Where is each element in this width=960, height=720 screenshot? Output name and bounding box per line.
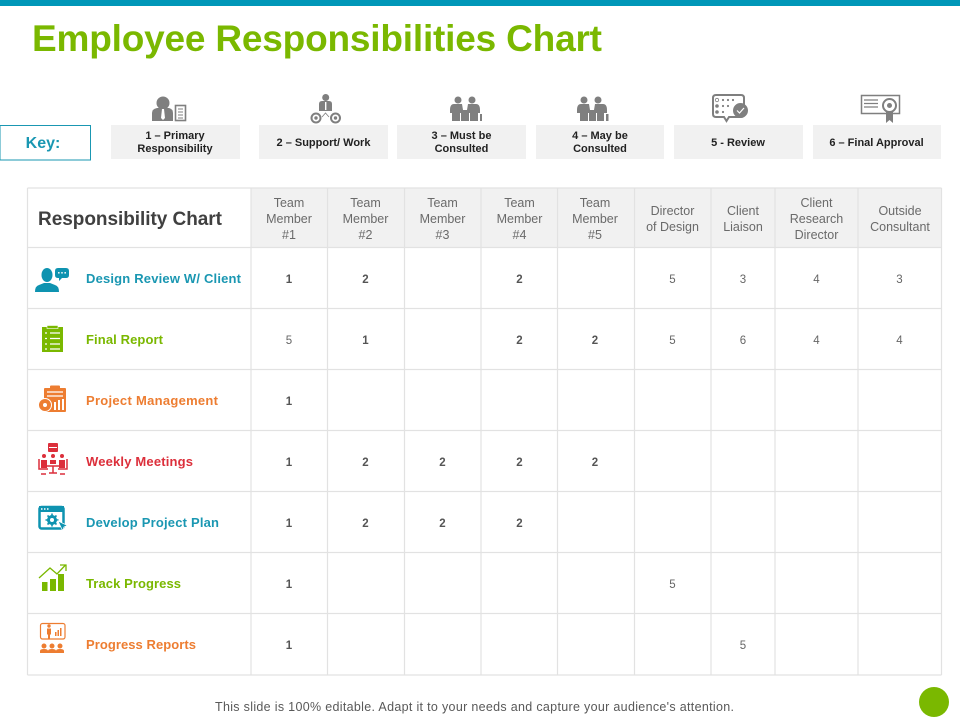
row: project management	[38, 386, 293, 412]
key label: Key:	[26, 135, 60, 152]
row: track progress: 1	[286, 579, 293, 591]
row: final report: 2	[592, 335, 598, 347]
row: progress reports	[40, 624, 746, 653]
key item 5: review	[674, 95, 803, 159]
row: design review: 2	[362, 274, 369, 286]
row: develop project plan	[39, 506, 523, 530]
row: track progress	[39, 565, 676, 591]
column headers: Director	[651, 204, 694, 218]
row: track progress: Track Progress	[86, 576, 181, 591]
row: track progress: 5	[669, 579, 676, 591]
row: develop project plan: 1	[286, 518, 293, 530]
key item 4: may be consulted	[536, 96, 664, 159]
top accent bar	[0, 0, 960, 6]
column headers: #5	[588, 228, 602, 242]
row: weekly meetings: 1	[286, 457, 293, 469]
key item 4: may be consulted: Consulted	[573, 143, 627, 155]
key item 6: final approval: 6 – Final Approval	[829, 137, 924, 149]
key label	[0, 126, 90, 160]
row: design review	[35, 268, 903, 292]
row: final report: 5	[286, 335, 292, 347]
key item 3: must be consulted: 3 – Must be	[432, 130, 491, 142]
chart heading: Responsibility Chart	[38, 209, 223, 230]
key item 1: primary responsibility	[111, 96, 240, 159]
column headers: Consultant	[870, 220, 930, 234]
column headers: Member	[497, 212, 542, 226]
column headers: Team	[274, 196, 304, 210]
column headers: #1	[282, 228, 296, 242]
key item 3: must be consulted	[397, 96, 526, 159]
row: weekly meetings	[39, 443, 598, 474]
row: final report: 6	[740, 335, 746, 347]
row: final report: 5	[669, 335, 676, 347]
row: weekly meetings: 2	[439, 457, 446, 469]
row: weekly meetings: Weekly Meetings	[86, 454, 193, 469]
row: weekly meetings: 2	[516, 457, 523, 469]
column headers: Team	[504, 196, 535, 210]
footer note: This slide is 100% editable. Adapt it to your needs and capture your audience's attention.	[215, 700, 734, 714]
key item 1: primary responsibility: 1 – Primary	[145, 130, 206, 142]
column headers: Member	[572, 212, 618, 226]
row: final report	[42, 326, 903, 352]
row: progress reports: Progress Reports	[86, 637, 196, 652]
row: project management: Project Management	[86, 393, 219, 408]
column headers	[266, 196, 930, 242]
column headers: Member	[343, 212, 388, 226]
row: design review: 3	[740, 274, 746, 286]
row: design review: 5	[669, 274, 676, 286]
column headers: #3	[436, 228, 449, 242]
column headers: of Design	[646, 220, 699, 234]
row: develop project plan: 2	[362, 518, 369, 530]
column headers: Client	[801, 196, 833, 210]
key item 5: review: 5 - Review	[711, 137, 765, 149]
title: Employee Responsibilities Chart	[32, 18, 602, 59]
row: develop project plan: 2	[516, 518, 523, 530]
row: develop project plan: 2	[439, 518, 446, 530]
column headers: Team	[580, 196, 610, 210]
row: final report: 4	[896, 335, 903, 347]
key item 6: final approval	[813, 96, 941, 159]
page marker circle	[919, 687, 949, 717]
key item 2: support / work: 2 – Support/ Work	[277, 137, 371, 149]
row: final report: Final Report	[86, 332, 164, 347]
column headers: #4	[513, 228, 526, 242]
row: project management: 1	[286, 396, 293, 408]
column headers: Member	[266, 212, 312, 226]
key item 4: may be consulted: 4 – May be	[572, 130, 628, 142]
row: final report: 1	[362, 335, 369, 347]
row: design review: Design Review W/ Client	[86, 271, 242, 286]
key item 3: must be consulted: Consulted	[435, 143, 488, 155]
column headers: Director	[795, 228, 838, 242]
row: final report: 4	[813, 335, 820, 347]
column headers: Liaison	[723, 220, 763, 234]
row: weekly meetings: 2	[362, 457, 369, 469]
key item 1: primary responsibility: Responsibility	[137, 143, 213, 155]
row: final report: 2	[516, 335, 523, 347]
column headers: Team	[427, 196, 458, 210]
row: design review: 3	[896, 274, 903, 286]
responsibility table	[28, 188, 942, 675]
column headers: Team	[350, 196, 381, 210]
row: weekly meetings: 2	[592, 457, 598, 469]
key item 2: support / work	[259, 94, 388, 159]
column headers: #2	[359, 228, 372, 242]
row: design review: 2	[516, 274, 523, 286]
column headers: Client	[727, 204, 760, 218]
table header background	[251, 188, 941, 248]
column headers: Outside	[878, 204, 922, 218]
row: progress reports: 5	[740, 640, 746, 652]
row: develop project plan: Develop Project Plan	[86, 515, 219, 530]
column headers: Member	[420, 212, 465, 226]
row: progress reports: 1	[286, 640, 293, 652]
row: design review: 4	[813, 274, 820, 286]
column headers: Research	[790, 212, 843, 226]
row: design review: 1	[286, 274, 293, 286]
